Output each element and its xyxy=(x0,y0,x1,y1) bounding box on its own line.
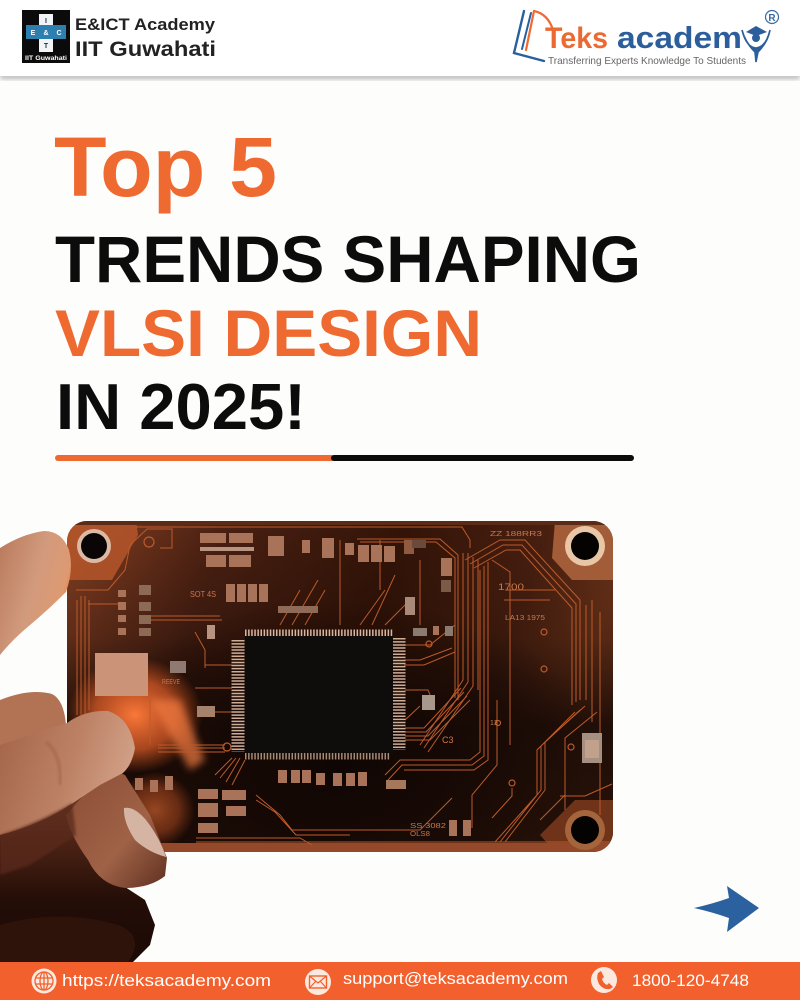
top finger xyxy=(0,531,71,655)
small board markings: ZZ 188RR3 xyxy=(490,531,542,538)
phone xyxy=(591,967,749,993)
logo: Teks academy xyxy=(514,10,778,67)
icon: E&ICT emblem: E xyxy=(31,30,36,37)
icon: graduate y xyxy=(742,26,770,62)
email xyxy=(305,969,568,995)
copper traces xyxy=(76,527,612,845)
small board markings xyxy=(162,531,545,838)
back finger xyxy=(0,692,66,780)
icon: open book xyxy=(514,11,553,61)
wordmark xyxy=(545,20,742,55)
small board markings: 1700 xyxy=(498,582,524,592)
surface mount components xyxy=(118,533,602,836)
registered mark xyxy=(766,10,778,24)
wordmark: academ xyxy=(617,20,742,55)
email: support@teksacademy.com xyxy=(343,969,568,988)
arrow xyxy=(694,886,759,932)
footer bar xyxy=(0,962,800,1000)
icon: envelope xyxy=(305,969,331,995)
icon: E&ICT emblem: C xyxy=(56,30,62,37)
organisation name: E&ICT Academy xyxy=(75,15,216,34)
icon: E&ICT emblem: IIT Guwahati xyxy=(25,55,67,62)
title xyxy=(54,120,641,443)
processor chip xyxy=(238,633,399,756)
copper pad xyxy=(95,653,148,696)
title: VLSI DESIGN xyxy=(55,296,482,370)
title: TRENDS SHAPING xyxy=(55,222,641,296)
logo: E&ICT Academy IIT Guwahati xyxy=(22,10,216,63)
icon: E&ICT emblem: I xyxy=(45,18,47,25)
index finger and nail xyxy=(66,768,167,888)
organisation name xyxy=(75,15,216,61)
thumb xyxy=(0,711,135,835)
registered mark: R xyxy=(768,13,776,24)
header bar xyxy=(0,0,800,79)
website: https://teksacademy.com xyxy=(62,971,271,990)
organisation name: IIT Guwahati xyxy=(75,38,216,61)
small board markings: OLS8 xyxy=(410,831,430,838)
phone: 1800-120-4748 xyxy=(632,971,749,990)
lower hand xyxy=(0,790,155,962)
hand holding the board xyxy=(0,531,167,962)
orange glow under the thumb xyxy=(67,657,203,773)
small board markings: SOT 4S xyxy=(190,590,216,599)
small board markings: REEVE xyxy=(162,679,180,686)
circuit board photo xyxy=(67,521,613,860)
tagline: Transferring Experts Knowledge To Students xyxy=(548,55,746,67)
icon: E&ICT emblem: T xyxy=(44,43,49,50)
title underline xyxy=(55,455,634,461)
small board markings: 13 xyxy=(490,720,498,727)
icon: E&ICT emblem: & xyxy=(43,30,49,37)
wordmark: Teks xyxy=(545,22,608,55)
title: IN 2025! xyxy=(56,370,306,443)
icon: globe xyxy=(32,968,56,994)
website xyxy=(32,968,271,994)
icon: phone xyxy=(591,967,617,993)
mounting holes xyxy=(77,526,605,850)
small board markings: C3 xyxy=(442,735,454,745)
small board markings: LA13 1975 xyxy=(505,615,545,622)
icon: E&ICT emblem xyxy=(22,10,70,63)
small board markings: SS 3082 xyxy=(410,823,446,830)
corner pads xyxy=(67,521,138,580)
title: Top 5 xyxy=(54,120,277,214)
